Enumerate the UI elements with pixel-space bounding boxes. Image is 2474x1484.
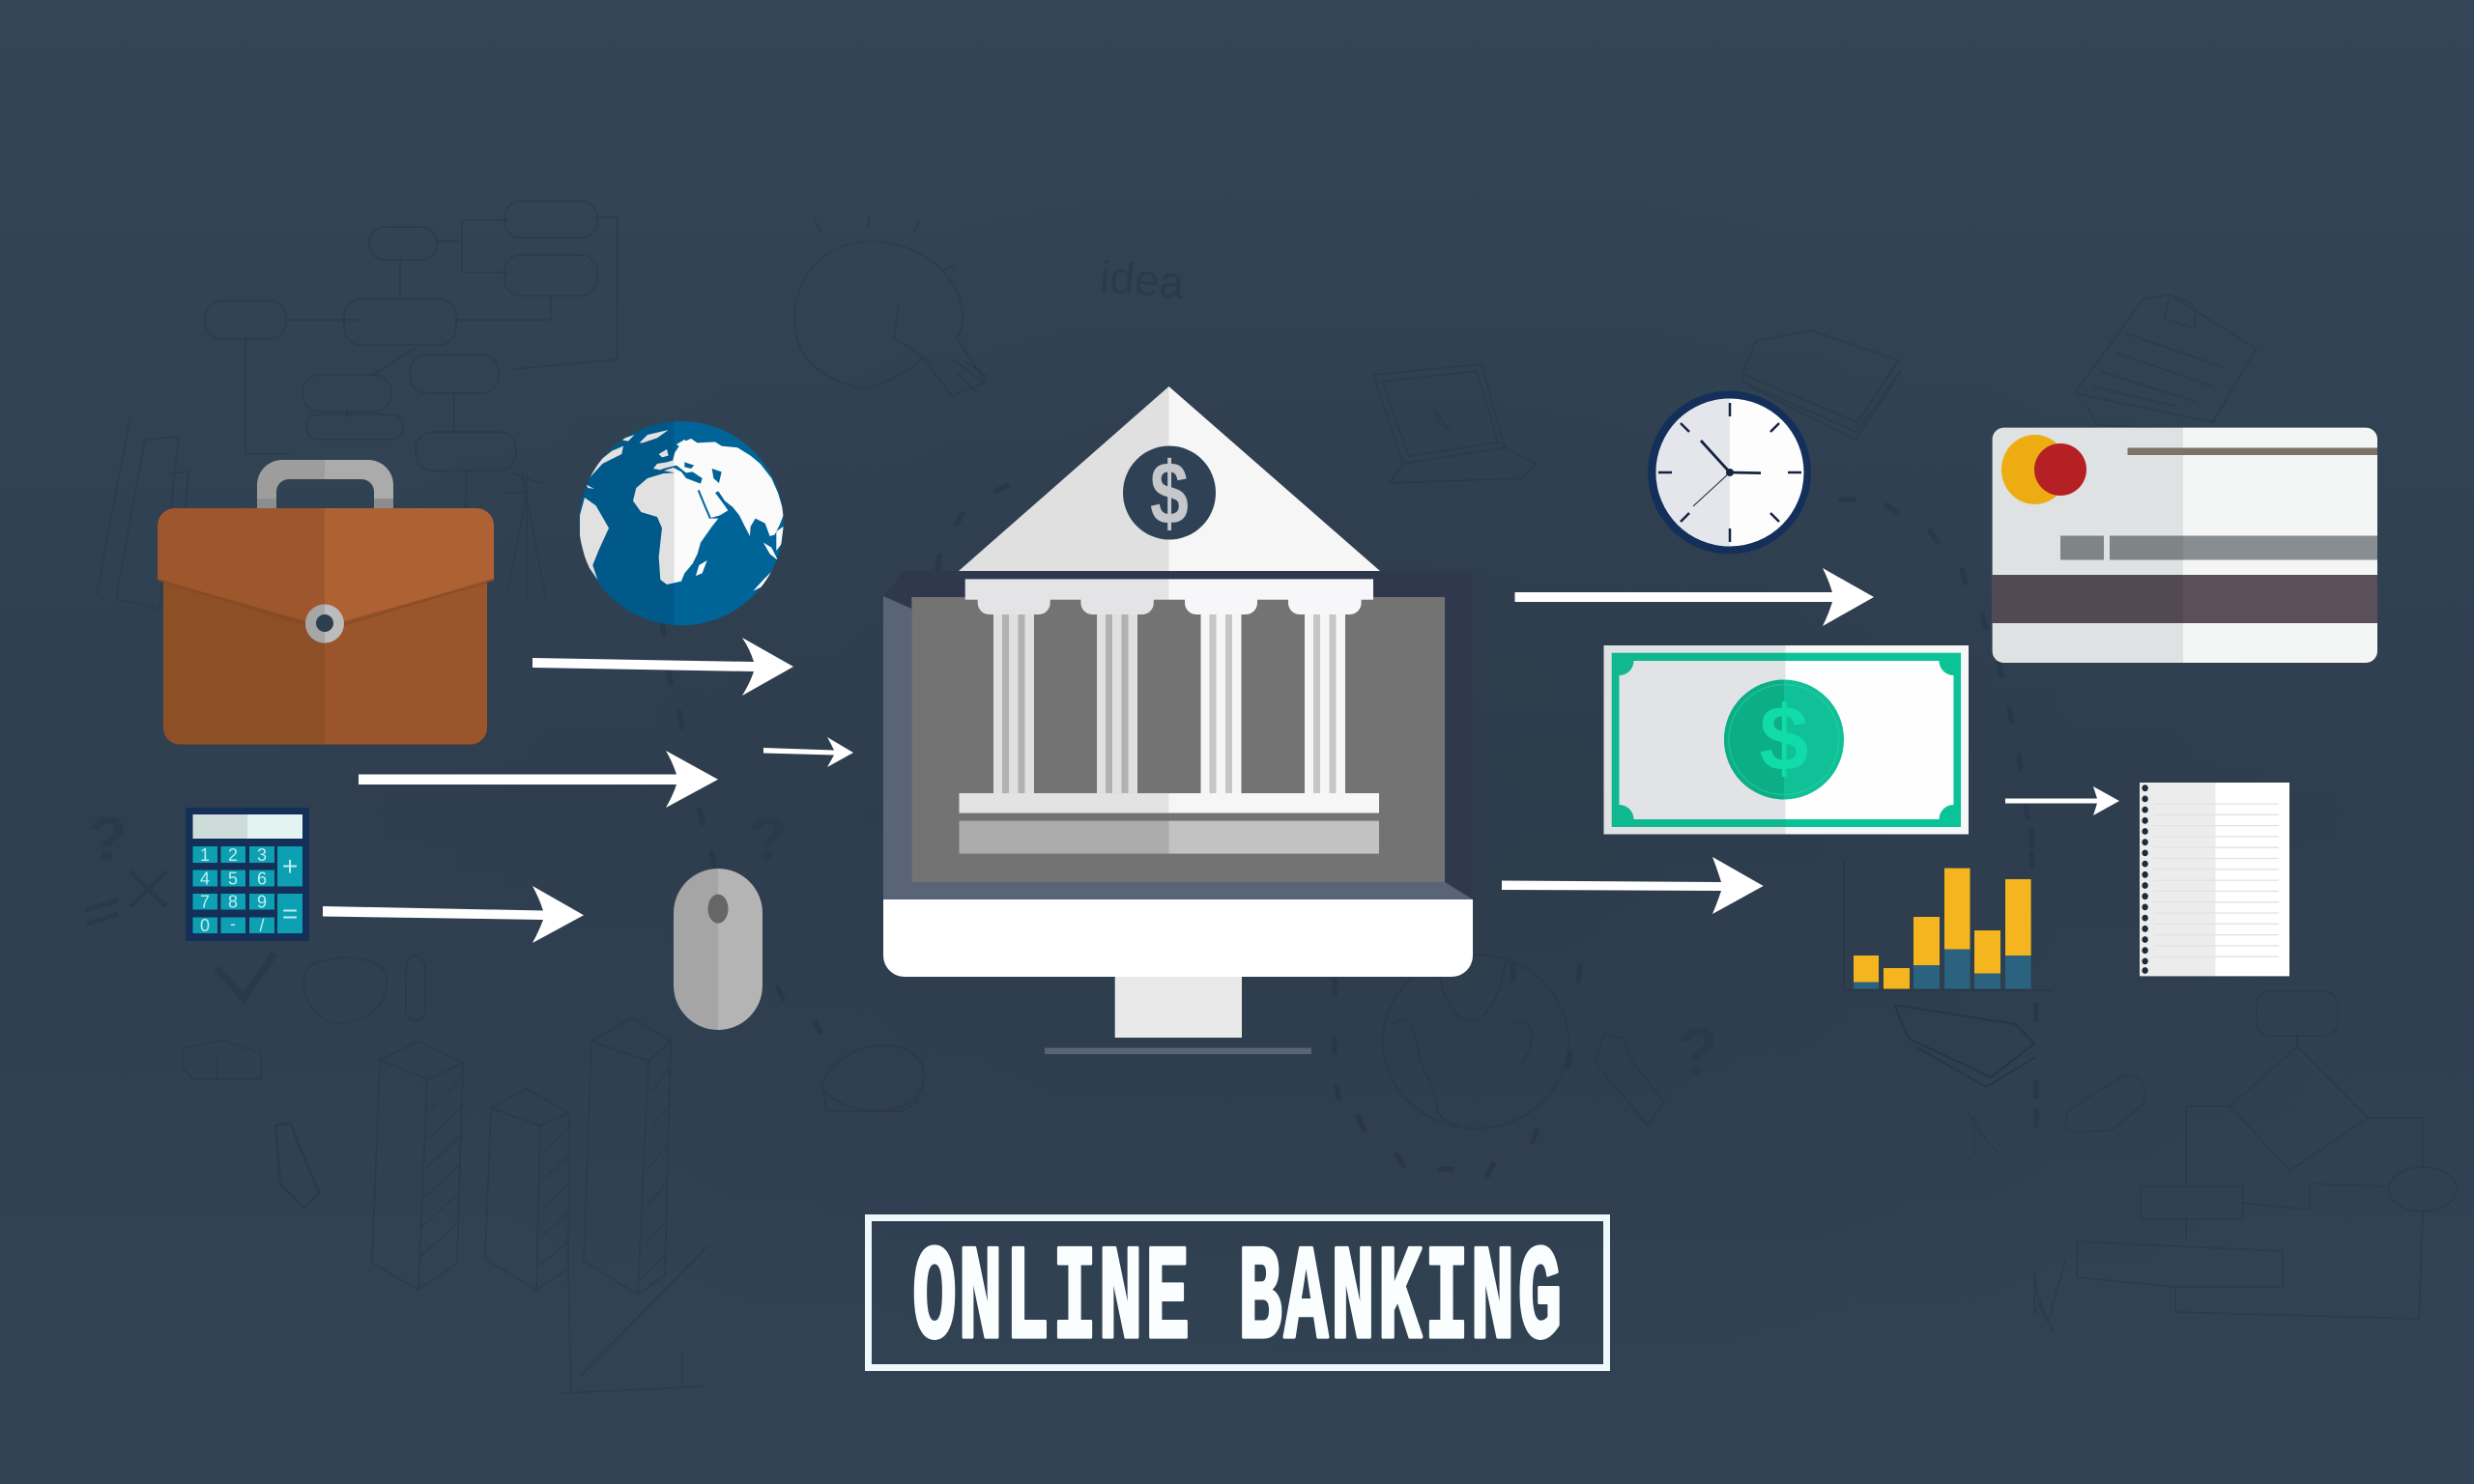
sketch: note paper [2075, 295, 2257, 430]
arrow: bill to notebook [2005, 786, 2119, 815]
arrow: calculator to mouse [323, 886, 584, 943]
sketch: book bottom right [1894, 1005, 2034, 1087]
keypad: 1 [200, 845, 210, 865]
icon: dollar bill [1604, 645, 1969, 835]
sketch: light bulb [794, 214, 988, 396]
keypad: + [282, 851, 298, 881]
sketch: question marks and math signs [85, 804, 1718, 1089]
keypad: 7 [200, 893, 210, 912]
signature strip [2128, 448, 2377, 455]
keypad: 0 [200, 916, 210, 935]
flap [158, 508, 325, 626]
sketch: question marks and math signs: ? [89, 804, 127, 873]
bill green border [1612, 653, 1961, 827]
sketch: bars behind briefcase [97, 415, 546, 609]
title box [868, 1217, 1606, 1378]
keypad [193, 845, 302, 935]
magnetic strip [1993, 575, 2377, 623]
sketch: flowchart top left [205, 201, 618, 512]
infographic canvas [85, 216, 2457, 1371]
icon: credit card [1993, 428, 2377, 663]
keypad: / [259, 916, 265, 935]
sketch: question marks and math signs: ? [1677, 1013, 1718, 1089]
body [163, 570, 325, 744]
bank columns [993, 609, 1345, 793]
icon: briefcase [158, 460, 494, 744]
bank capitals [978, 594, 1362, 614]
arrow: monitor to chart [1502, 857, 1764, 914]
keypad: 3 [257, 845, 267, 865]
arrow: small to monitor [763, 737, 853, 767]
card number [2060, 535, 2377, 560]
arrow: middle long [359, 751, 718, 808]
sketch: bar chart bottom left [275, 1017, 707, 1394]
sketch: dashed rings [661, 486, 2036, 1176]
dollar badge: $ [1150, 443, 1189, 543]
sketch: small icons bottom left [183, 956, 924, 1111]
keypad: 9 [257, 893, 267, 912]
icon: notebook [2140, 783, 2289, 976]
keypad: 2 [228, 845, 238, 865]
bank roof [959, 386, 1380, 571]
title: ONLINE BANKING [912, 1225, 1562, 1378]
icon: bank inside monitor [883, 386, 1473, 1054]
sketch: globe [1383, 955, 1664, 1128]
sketch: book stack [1742, 330, 1900, 440]
sketch: idea label: idea [1098, 251, 1187, 308]
arrow: briefcase to bank [532, 638, 793, 696]
sketch: flowchart bottom right [1967, 991, 2457, 1333]
icon: mouse [674, 869, 762, 1030]
bill coin: $ [1760, 686, 1808, 790]
notebook lines [2154, 804, 2279, 956]
clasp [305, 605, 344, 643]
sketch: laptop [1373, 364, 1537, 483]
monitor stand [1045, 977, 1311, 1054]
icon: calculator [186, 808, 309, 941]
keypad: - [230, 914, 236, 933]
monitor screen [911, 597, 1445, 882]
keypad: 8 [228, 893, 238, 912]
keypad: 6 [257, 870, 267, 889]
arrow: monitor to card [1515, 568, 1874, 626]
handle [257, 460, 393, 508]
keypad: 4 [200, 870, 210, 889]
dollar badge [1123, 443, 1216, 543]
icon: bar chart [1844, 860, 2054, 990]
background sketches [97, 201, 2457, 1394]
bank entablature [965, 579, 1373, 600]
inland seas [651, 462, 722, 519]
monitor chin [883, 899, 1473, 977]
notebook rings [2142, 785, 2148, 974]
keypad: = [282, 899, 298, 928]
card logo [2001, 435, 2086, 504]
monitor frame [883, 571, 1473, 899]
keypad: 5 [228, 870, 238, 889]
icon: wall clock [1648, 390, 1811, 555]
bill coin [1724, 680, 1844, 800]
display [193, 814, 302, 839]
sketch: question marks and math signs: ? [749, 804, 787, 873]
icon: globe [570, 415, 784, 631]
bank base [959, 793, 1379, 854]
